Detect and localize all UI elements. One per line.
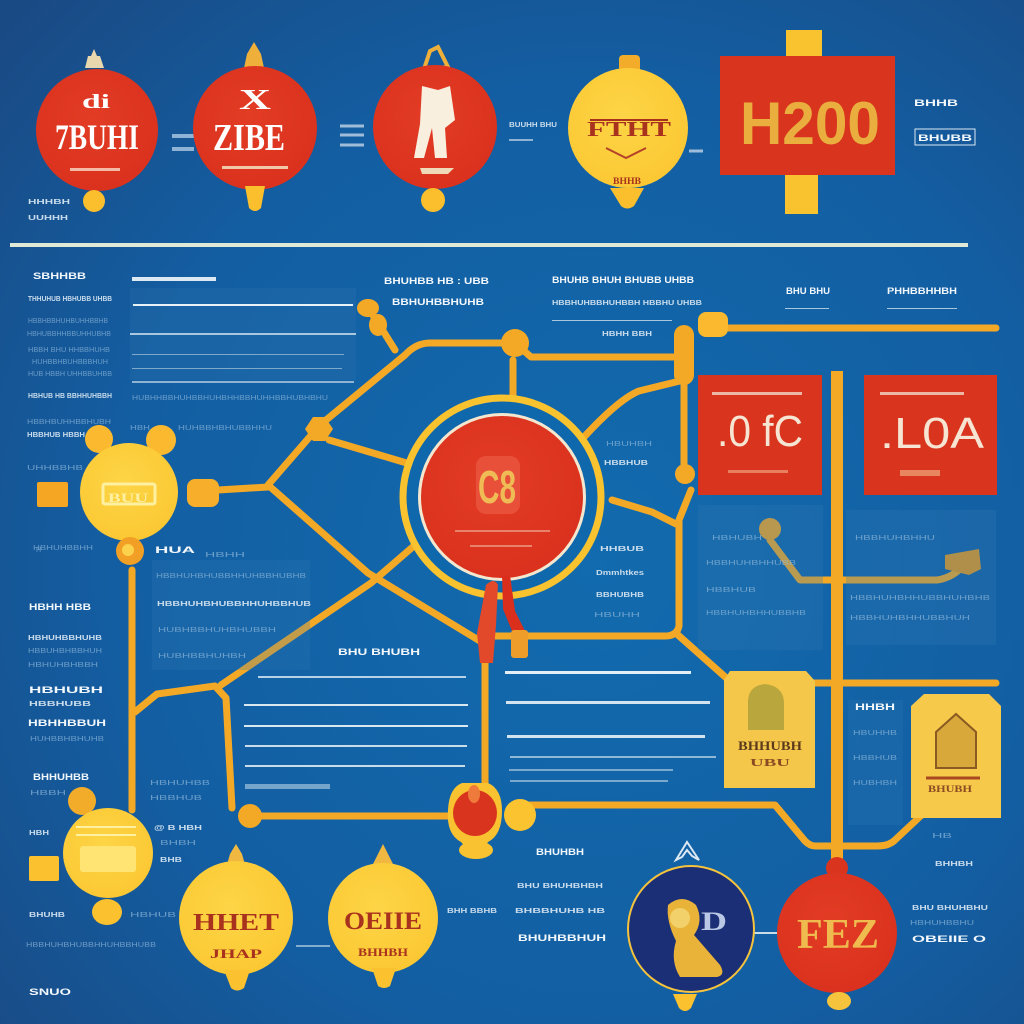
text: lower left: SNUO bbox=[29, 987, 71, 997]
text block: left middle: HBBHUBB bbox=[29, 701, 91, 708]
panel: top badge 4: BHHB bbox=[613, 176, 641, 186]
text block: left middle: HBHUHBHBBH bbox=[28, 662, 98, 669]
panel: central red circle: C8 bbox=[478, 461, 516, 513]
panel: right blue blocks bbox=[698, 505, 996, 825]
text: lower centre: BHH BBHB bbox=[447, 908, 497, 915]
connector: equals 2 bbox=[340, 126, 364, 145]
panel: top badge 1 bbox=[28, 49, 158, 222]
text: lower right bbox=[910, 833, 988, 944]
panel: red square 1: .0 fC bbox=[717, 407, 803, 456]
node: upper left joints bbox=[305, 299, 981, 575]
text: lower right: BHHBH bbox=[935, 861, 973, 868]
small note: BUUHH BHU bbox=[509, 122, 557, 129]
panel: middle left text panel: HBBHUHBHUBBHHUHBBHUB bbox=[157, 601, 311, 608]
panel: right blue blocks: HBBHUHBHHUBBHB bbox=[706, 610, 806, 617]
text block: left middle: HUHBBHBHUHB bbox=[30, 736, 104, 743]
panel: lower red badge: FEZ bbox=[797, 912, 879, 958]
panel: lower red badge bbox=[777, 857, 897, 1010]
text: lower left: BHUHB bbox=[29, 912, 65, 919]
panel: right blue blocks: HBHUBH bbox=[712, 535, 762, 542]
text: right of hub: BBHUBHB bbox=[596, 592, 644, 599]
panel: lower navy badge: D bbox=[701, 907, 727, 936]
panel: middle left text panel bbox=[152, 545, 311, 670]
panel: lower badge B: BHHBH bbox=[358, 945, 409, 959]
panel: lower badge A: HHET bbox=[193, 910, 279, 936]
text: lower right: OBEIIE O bbox=[912, 934, 986, 944]
panel: right blue blocks: HBBHUB bbox=[706, 587, 757, 594]
text: top right labels: BHUBB bbox=[918, 133, 973, 143]
text: right of hub bbox=[594, 441, 652, 619]
text: heading right top: HBHH BBH bbox=[602, 331, 652, 338]
ribbon bbox=[477, 575, 528, 663]
text: lower left: HBH bbox=[29, 830, 49, 837]
panel: middle left text panel: HUBHBBHUHBH bbox=[158, 653, 246, 660]
text: heading right top: BHUHB BHUH BHUBB UHBB bbox=[552, 275, 695, 285]
text: lower left: HBBHUHBHUBBHHUHBBHUBB bbox=[26, 942, 156, 949]
text block: left column: HBBH BHU HHBBHUHB bbox=[28, 347, 110, 354]
panel: middle left text panel: HBBHUHBHUBBHHUHBBHUBHB bbox=[156, 573, 306, 580]
text block: left column: HBBHBUHHBBHUBH bbox=[27, 419, 111, 426]
panel: top badge 4: FTHT bbox=[587, 117, 671, 141]
card: yellow card 1 bbox=[724, 671, 815, 788]
panel: lower badge B bbox=[328, 844, 438, 988]
text: heading far right bbox=[785, 286, 957, 309]
text: top right labels bbox=[914, 98, 975, 145]
text: right of hub: HHBUB bbox=[600, 546, 644, 553]
text block: left middle: HBHH HBB bbox=[29, 602, 92, 612]
text block: left middle: HBHUBH bbox=[29, 685, 103, 695]
text: heading centre top: BBHUHBBHUHB bbox=[392, 297, 485, 307]
panel: right blue blocks: HBBHUHBHHUBBHUHBHB bbox=[850, 595, 991, 602]
panel: top badge 2 bbox=[193, 42, 317, 211]
text: lower left: @ B HBH bbox=[154, 825, 202, 832]
card: yellow card 1: BHHUBH bbox=[738, 738, 802, 753]
panel: right blue blocks: HHBH bbox=[855, 702, 895, 712]
panel: middle left text panel: HUA bbox=[155, 545, 196, 555]
text: right of hub: HBBHUB bbox=[604, 460, 648, 467]
panel: centre lower text: BHU BHUBH bbox=[338, 647, 420, 657]
panel: red square 1 bbox=[698, 375, 822, 495]
panel: top red sign: H200 bbox=[740, 90, 880, 157]
text: heading right top bbox=[552, 275, 702, 338]
text: heading far right: BHU BHU bbox=[786, 286, 830, 296]
text: lower left: HBBHUB bbox=[150, 795, 203, 802]
divider bbox=[10, 243, 968, 247]
text: right of hub: HBUHH bbox=[594, 612, 640, 619]
panel: central red circle bbox=[403, 398, 601, 596]
connector: dash bbox=[509, 139, 533, 141]
text: lower left: BHBH bbox=[160, 840, 196, 847]
text: lower left: HBBH bbox=[30, 790, 66, 797]
panel: upper left chart panel bbox=[130, 277, 356, 432]
text block: left middle: H bbox=[36, 547, 41, 554]
panel: top badge 1: HHHBH bbox=[28, 199, 70, 206]
text block: left middle bbox=[28, 547, 106, 743]
panel: right blue blocks: HBUHHB bbox=[853, 730, 897, 737]
panel: left yellow hub: BUU bbox=[108, 490, 149, 505]
panel: upper left chart panel: HUBHHBBHUHBBHUHBHHBBHUHHBBHUBHBHU bbox=[132, 395, 328, 402]
panel: top badge 4 bbox=[568, 55, 688, 208]
connector: stub bbox=[689, 150, 703, 152]
connector: navy to red bbox=[752, 932, 780, 934]
text: lower centre: BHUHBBHUH bbox=[518, 933, 606, 943]
network lines bbox=[132, 308, 996, 846]
icon: person badge bbox=[448, 783, 502, 859]
text block: left column: HUHBBHBUHBBBHUH bbox=[32, 359, 108, 366]
vertical orange bar bbox=[831, 371, 843, 861]
text block: left middle: HBHUHBBHUHB bbox=[28, 635, 102, 642]
text: heading centre top: BHUHBB HB : UBB bbox=[384, 276, 490, 286]
card: yellow card 2 bbox=[911, 694, 1001, 818]
panel: top badge 1: UUHHH bbox=[28, 215, 68, 222]
text: right of hub: Dmmhtkes bbox=[596, 570, 644, 577]
panel: red square 2: .L0A bbox=[880, 409, 985, 458]
text: lower left: HBHUB bbox=[130, 912, 177, 919]
panel: centre lower text bbox=[244, 647, 468, 789]
panel: left yellow hub bbox=[37, 425, 219, 565]
panel: upper left chart panel: HUHBBHBHUBBHHU bbox=[178, 425, 272, 432]
panel: lower badge A: JHAP bbox=[210, 946, 262, 961]
node: left end bbox=[238, 804, 262, 828]
panel: top red sign bbox=[720, 30, 895, 214]
text block: left column: HBHUHBBHH bbox=[33, 545, 93, 552]
text: lower right: BHU BHUHBHU bbox=[912, 905, 988, 912]
text block: left column: HBBHUB HBBH bbox=[27, 432, 85, 439]
text: lower centre bbox=[447, 847, 606, 943]
panel: red square 2 bbox=[864, 375, 997, 495]
panel: centre right lower text bbox=[505, 671, 716, 782]
panel: right blue blocks: HBBHUHBHHU bbox=[855, 535, 935, 542]
text block: left column: HUB HBBH UHHBBUHBB bbox=[28, 371, 112, 378]
text block: left column: SBHHBB bbox=[33, 271, 87, 281]
text: lower right: HBHUHBBHU bbox=[910, 920, 974, 927]
panel: lower left yellow badge bbox=[29, 787, 153, 925]
card: yellow card 2: BHUBH bbox=[928, 784, 972, 794]
panel: top badge 2: ZIBE bbox=[213, 117, 285, 159]
panel: middle left text panel: HBHH bbox=[205, 552, 245, 559]
text block: left column bbox=[27, 271, 112, 552]
text: lower centre: BHU BHUHBHBH bbox=[517, 883, 603, 890]
panel: right blue blocks: HBBHUHBHHUBBHUH bbox=[850, 615, 970, 622]
node: yellow moon bbox=[504, 799, 536, 831]
panel: middle left text panel: HUBHBBHUHBHUBBH bbox=[158, 627, 276, 634]
panel: right blue blocks: HUBHBH bbox=[853, 780, 897, 787]
text: top right labels: BHHB bbox=[914, 98, 959, 108]
panel: top badge 2: X bbox=[239, 85, 271, 116]
text: lower right: HB bbox=[932, 833, 953, 840]
panel: lower badge A bbox=[179, 844, 293, 990]
text: lower left: BHHUHBB bbox=[33, 772, 90, 782]
text block: left column: HBHUBBHHBBUHHUBHB bbox=[27, 331, 111, 338]
text: heading centre top bbox=[384, 276, 490, 307]
panel: lower badge B: OEIIE bbox=[344, 908, 422, 935]
text: heading far right: PHHBBHHBH bbox=[887, 286, 957, 296]
panel: lower navy badge bbox=[627, 865, 755, 1011]
text block: left column: THHUHUB HBHUBB UHBB bbox=[28, 296, 112, 303]
text: lower centre: BHUHBH bbox=[536, 847, 584, 857]
panel: top badge 1: di bbox=[82, 91, 111, 113]
text: lower left: BHB bbox=[160, 857, 182, 864]
panel: upper left chart panel: HBH bbox=[130, 425, 150, 432]
card: yellow card 1: UBU bbox=[750, 757, 790, 769]
panel: top badge 3 bbox=[373, 47, 497, 212]
text block: left middle: HBHHBBUH bbox=[28, 718, 106, 728]
connector: badge link bbox=[296, 945, 330, 947]
text: heading right top: HBBHUHBBHUHBBH HBBHU UHBB bbox=[552, 300, 702, 307]
text block: left middle: HBBUHBHBBHUH bbox=[28, 648, 102, 655]
panel: right blue blocks: HBBHUB bbox=[853, 755, 897, 762]
text: right of hub: HBUHBH bbox=[606, 441, 652, 448]
text block: left column: HBBHBBHUHBUHHBBHB bbox=[28, 318, 108, 325]
panel: top badge 1: 7BUHI bbox=[55, 117, 139, 157]
text: lower left: HBHUHBB bbox=[150, 780, 211, 787]
icon: mountain bbox=[676, 842, 699, 860]
text block: left column: UHHBBHB bbox=[27, 465, 84, 472]
text: lower left bbox=[26, 772, 211, 997]
text: lower centre: BHBBHUHB HB bbox=[515, 908, 605, 915]
panel: right blue blocks: HBBHUHBHHUBB bbox=[706, 560, 797, 567]
text block: left column: HBHUB HB BBHHUHBBH bbox=[28, 393, 112, 400]
connector: equals 1 bbox=[172, 136, 194, 149]
